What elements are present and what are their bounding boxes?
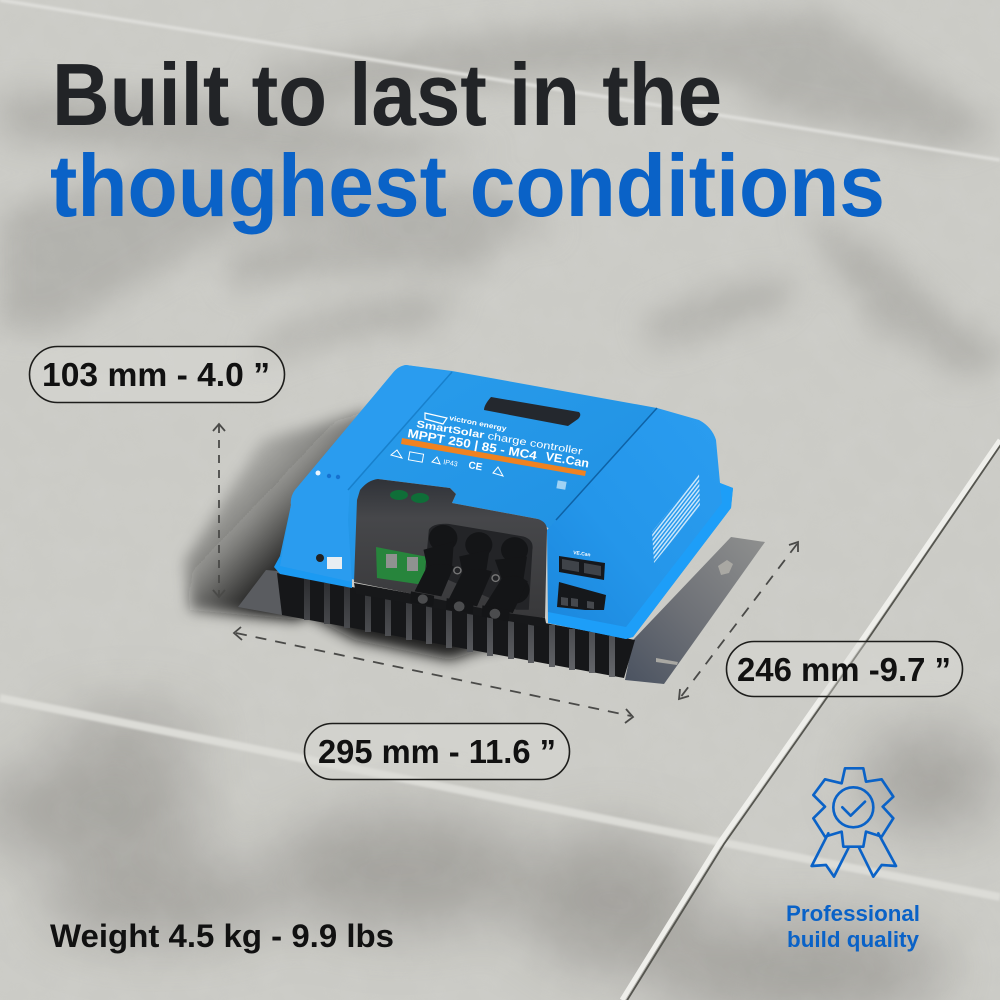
quality label <box>786 901 920 952</box>
main body top face <box>280 365 657 580</box>
icon: gear badge with ribbons <box>812 768 896 877</box>
pill: depth dimension <box>726 642 962 696</box>
pill: length dimension: 295 mm - 11.6 ” <box>318 733 556 770</box>
quality label: build quality <box>787 927 920 952</box>
VE.Can ports <box>559 550 605 580</box>
pill: length dimension <box>304 724 570 780</box>
label text on the top face <box>391 413 590 490</box>
title <box>50 45 885 235</box>
right end cap <box>547 408 733 639</box>
pill: depth dimension: 246 mm -9.7 ” <box>737 651 951 688</box>
dimension arrow: height <box>213 424 225 597</box>
dimension arrow: length <box>234 627 633 723</box>
green terminal block <box>376 547 428 585</box>
quality label: Professional <box>786 901 920 926</box>
brand logo <box>425 413 447 424</box>
brand: victron energy <box>449 415 507 433</box>
left end cap <box>280 365 452 582</box>
MC4 connectors <box>410 524 533 621</box>
product: MPPT solar charge controller <box>238 365 765 684</box>
warning icons <box>391 450 503 476</box>
title line 2: thoughest conditions <box>50 136 885 235</box>
VE.Can: VE.Can <box>544 449 590 471</box>
certification row: IP43 <box>443 459 458 468</box>
QR code <box>556 480 567 490</box>
vent markings <box>652 473 700 563</box>
pill: height dimension: 103 mm - 4.0 ” <box>42 356 270 393</box>
relay terminals <box>557 582 606 610</box>
title line 1: Built to last in the <box>52 45 722 144</box>
weight label: Weight 4.5 kg - 9.9 lbs <box>50 918 394 954</box>
battery terminals <box>390 490 429 503</box>
pill: height dimension <box>30 346 284 402</box>
dimension arrow: depth <box>679 542 798 699</box>
dark connector panel <box>354 479 547 618</box>
VE.Can ports: VE.Can <box>573 550 591 558</box>
display cover <box>484 397 580 426</box>
device cast shadow <box>185 410 540 660</box>
model name: MPPT 250 | 85 - MC4 <box>406 426 538 463</box>
CE mark: CE <box>467 460 483 473</box>
right flange <box>548 483 733 639</box>
product name: SmartSolar charge controller <box>416 419 584 458</box>
orange stripe <box>401 438 586 476</box>
status LEDs <box>316 470 340 479</box>
manual icon <box>408 452 424 462</box>
heatsink fins <box>277 573 635 678</box>
USB port <box>316 554 342 569</box>
mounting plate <box>238 537 765 684</box>
left base flange <box>274 556 352 588</box>
